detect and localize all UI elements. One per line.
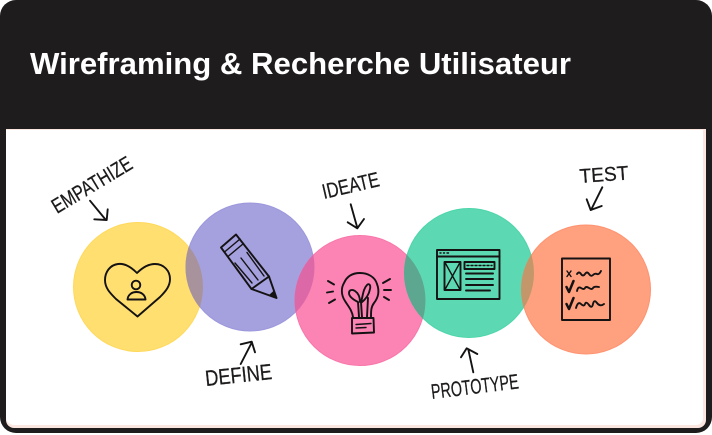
- arrow: test: [587, 187, 602, 210]
- arrow: prototype: [461, 348, 477, 372]
- white illustration panel: [6, 129, 706, 428]
- overlap: define and ideate: [294, 254, 314, 312]
- label: empathize: EMPATHIZE: [48, 152, 137, 218]
- arrow: define: [241, 342, 255, 364]
- label: ideate: IDEATE: [320, 168, 382, 204]
- overlap: prototype and test: [521, 254, 534, 308]
- icon: heart with person: [105, 264, 170, 316]
- overlap: empathize and define: [186, 246, 203, 308]
- icon: wireframe window: [437, 250, 500, 299]
- arrow: empathize: [90, 201, 108, 220]
- circle: define: [186, 203, 314, 331]
- circle: test: [522, 225, 650, 354]
- label: define: DEFINE: [204, 359, 273, 391]
- label: prototype: PROTOTYPE: [430, 370, 520, 404]
- overlap: ideate and prototype: [404, 254, 426, 319]
- icon: light bulb: [327, 273, 391, 334]
- arrow: ideate: [348, 204, 364, 228]
- circle: empathize: [74, 222, 202, 352]
- title: Wireframing & Recherche Utilisateur: [30, 46, 571, 81]
- circle: prototype: [404, 208, 534, 338]
- label: test: TEST: [579, 163, 629, 188]
- icon: pencil: [221, 234, 276, 298]
- icon: test checklist: [562, 258, 610, 320]
- circle: ideate: [295, 236, 425, 366]
